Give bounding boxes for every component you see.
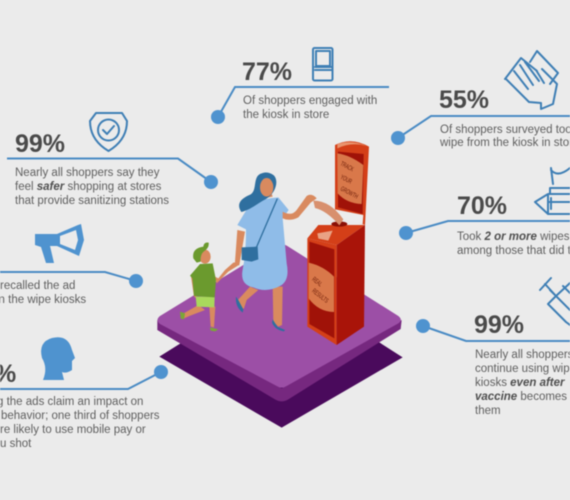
stat: ads impact on behavior: g the ads claim an impact on [0,396,143,408]
stat: 99% feel safer: feel safer shopping at stores [15,181,162,193]
kiosk sign text: TRACK [339,161,355,174]
platform [157,244,403,428]
central illustration: platform, kiosk, shoppers [157,141,403,428]
stat: 70% took 2 or more wipes [399,168,570,257]
icon: head silhouette [41,337,75,380]
stat: 70% took 2 or more wipes: Took 2 or more wipes [457,231,570,243]
icon: wipes pack [535,168,570,214]
child [180,242,239,331]
stat: 77% engaged with kiosk: Of shoppers engaged with [243,95,377,107]
stat: 55% took a wipe: 55% [439,86,489,114]
stat: ads impact on behavior: re likely to use mobile pay or [0,424,146,436]
stat: 99% continue after vaccine: kiosks even after [475,377,565,389]
stat: 99% feel safer [7,113,218,207]
stat: recalled the ad [0,224,143,306]
icon: kiosk [313,48,332,80]
kiosk [307,141,369,345]
icon: shield with check [90,113,127,151]
stat: 99% continue after vaccine: them [475,405,501,417]
stat: ads impact on behavior: behavior; one third of shoppers [1,410,160,422]
stat: 70% took 2 or more wipes: 70% [457,192,507,220]
stat: 70% took 2 or more wipes: among those that did t [457,245,570,257]
stat: 99% feel safer: Nearly all shoppers say they [15,167,160,179]
stat: 99% feel safer: 99% [15,130,65,158]
kiosk sign text [339,161,359,201]
kiosk sign text: YOUR [339,174,353,186]
stat: ads impact on behavior: u shot [0,438,32,450]
kiosk base text: RESULTS [310,288,330,305]
stat: ads impact on behavior [0,337,168,450]
icon: syringe [540,278,570,325]
kiosk sign text: GROWTH [339,186,359,201]
woman [235,172,343,331]
stat: 99% continue after vaccine [416,278,570,417]
stat: 99% continue after vaccine: 99% [474,311,524,339]
stat: 77% engaged with kiosk [211,48,389,124]
icon: hand wiping [505,51,558,109]
kiosk base text: REAL [310,276,323,289]
stat: 77% engaged with kiosk: 77% [242,58,292,86]
stat: 77% engaged with kiosk: the kiosk in store [243,109,329,121]
stat: 55% took a wipe [391,51,570,149]
icon: megaphone [35,224,84,263]
stat: 99% feel safer: that provide sanitizing stations [15,195,169,207]
stat: recalled the ad: recalled the ad [0,280,75,292]
stat: 99% continue after vaccine: vaccine becomes [475,391,567,403]
kiosk base text [310,276,330,305]
